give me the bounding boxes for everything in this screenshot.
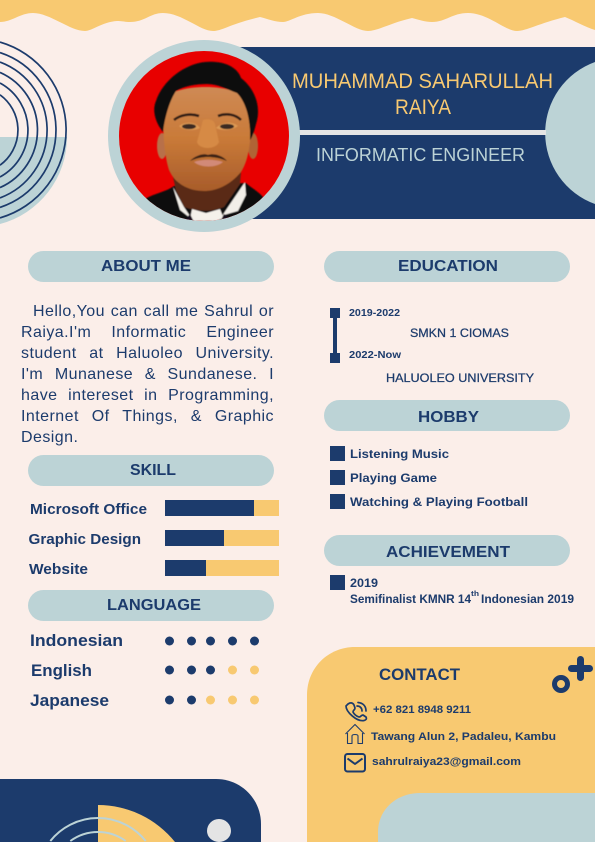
heading: skill: SKILL	[130, 462, 176, 479]
hobby list: Listening Music	[350, 447, 449, 461]
contact email: sahrulraiya23@gmail.com	[372, 756, 521, 768]
heading: language	[28, 590, 274, 621]
skill: microsoft office	[30, 500, 279, 518]
language: japanese: Japanese	[30, 691, 109, 710]
about me paragraph: student at Haluoleo University.	[21, 345, 274, 362]
education entry two: HALUOLEO UNIVERSITY	[386, 371, 534, 385]
icon: phone	[346, 702, 366, 721]
heading: language: LANGUAGE	[107, 597, 201, 614]
contact lower blue shape	[378, 793, 595, 842]
icon: house	[346, 724, 364, 744]
language: japanese	[30, 691, 259, 710]
language: english: English	[31, 661, 92, 680]
about me paragraph: Raiya.I'm Informatic Engineer	[21, 324, 274, 341]
achievement entry: Indonesian 2019	[481, 594, 574, 606]
skill: graphic design: Graphic Design	[28, 532, 141, 548]
education entry one: 2019-2022	[349, 307, 400, 319]
skill: microsoft office: Microsoft Office	[30, 502, 147, 518]
rings	[50, 818, 146, 841]
job title: INFORMATIC ENGINEER	[316, 144, 525, 165]
achievement entry: th	[471, 591, 479, 598]
contact address: Tawang Alun 2, Padaleu, Kambu	[371, 731, 556, 743]
name	[292, 70, 553, 119]
skill: website	[29, 560, 279, 578]
icon: plus and ring	[554, 660, 590, 690]
left decorative half circle with rings	[0, 42, 67, 224]
name: MUHAMMAD SAHARULLAH	[292, 70, 553, 93]
about me paragraph: I'm Munanese & Sundanese. I	[21, 366, 274, 383]
timeline marker	[330, 308, 340, 363]
achievement entry: 2019	[350, 576, 378, 590]
grey dot	[207, 819, 231, 842]
banner divider	[298, 130, 546, 135]
contact phone number: +62 821 8948 9211	[373, 704, 471, 716]
hobby list: Watching & Playing Football	[350, 495, 528, 509]
contact heading: CONTACT	[379, 666, 460, 684]
heading: hobby: HOBBY	[418, 409, 480, 426]
education entry one	[349, 307, 509, 340]
heading: skill	[28, 455, 274, 486]
name banner	[240, 47, 595, 219]
skill bars	[28, 500, 279, 578]
heading: about me	[28, 251, 274, 282]
achievement entry	[330, 575, 574, 606]
panel: contact	[307, 647, 595, 842]
about me paragraph: Hello,You can call me Sahrul or	[33, 303, 274, 320]
top wave	[0, 0, 595, 31]
language: english	[31, 661, 259, 680]
about me paragraph: Design.	[21, 429, 78, 446]
education timeline	[330, 307, 534, 385]
heading: achievement	[324, 535, 570, 566]
skill: graphic design	[28, 530, 279, 548]
banner circle	[545, 62, 595, 204]
heading: achievement: ACHIEVEMENT	[386, 544, 511, 561]
bottom left decorative panel	[0, 779, 261, 842]
skill: website: Website	[29, 562, 88, 578]
heading: education	[324, 251, 570, 282]
name: RAIYA	[395, 96, 451, 119]
hobby list: Playing Game	[350, 471, 437, 485]
education entry two: 2022-Now	[349, 349, 402, 361]
profile photo	[108, 40, 300, 232]
education entry two	[349, 349, 534, 385]
yellow quarter circle	[98, 805, 175, 842]
heading: hobby	[324, 400, 570, 431]
language: indonesian: Indonesian	[30, 631, 123, 650]
about me paragraph	[21, 303, 274, 446]
heading: education: EDUCATION	[398, 258, 498, 275]
heading: about me: ABOUT ME	[101, 258, 191, 275]
about me paragraph: have intereset in Programming,	[21, 387, 274, 404]
achievement entry: Semifinalist KMNR 14	[350, 594, 472, 606]
education entry one: SMKN 1 CIOMAS	[410, 326, 509, 340]
about me paragraph: Internet Of Things, & Graphic	[21, 408, 274, 425]
hobby list	[330, 446, 528, 509]
icon: envelope	[345, 754, 365, 772]
language ratings	[30, 631, 259, 710]
language: indonesian	[30, 631, 259, 650]
